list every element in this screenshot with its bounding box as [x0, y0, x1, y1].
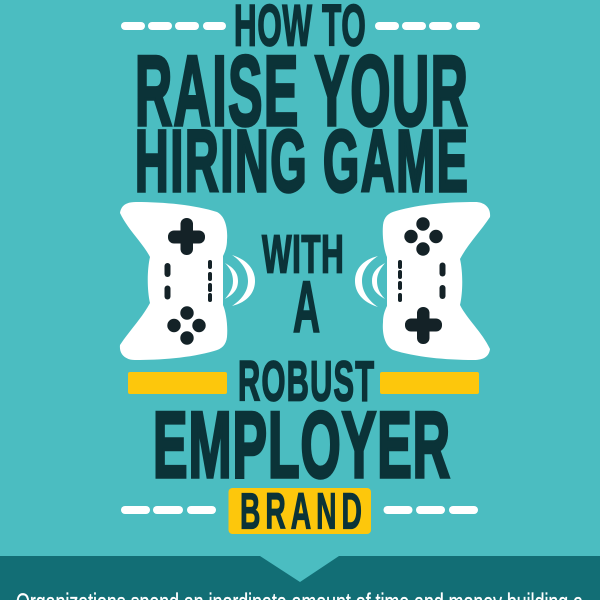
title: raise your: RAISE YOUR [135, 36, 468, 146]
title: employer: EMPLOYER [153, 393, 450, 498]
title: with: WITH [262, 225, 344, 285]
left yellow bar [128, 372, 227, 394]
title: robust: ROBUST [238, 349, 374, 413]
title: hiring game: HIRING GAME [135, 112, 468, 210]
bottom right dashes [384, 506, 478, 514]
title: a: A [293, 267, 320, 348]
bottom left dashes [121, 506, 216, 514]
right yellow bar [380, 372, 479, 394]
icon: right game controller [355, 202, 490, 360]
top left dashes [121, 22, 226, 30]
icon: left game controller [120, 202, 255, 360]
brand badge: BRAND [240, 483, 362, 540]
intro panel [0, 556, 600, 600]
top right dashes [375, 22, 480, 30]
